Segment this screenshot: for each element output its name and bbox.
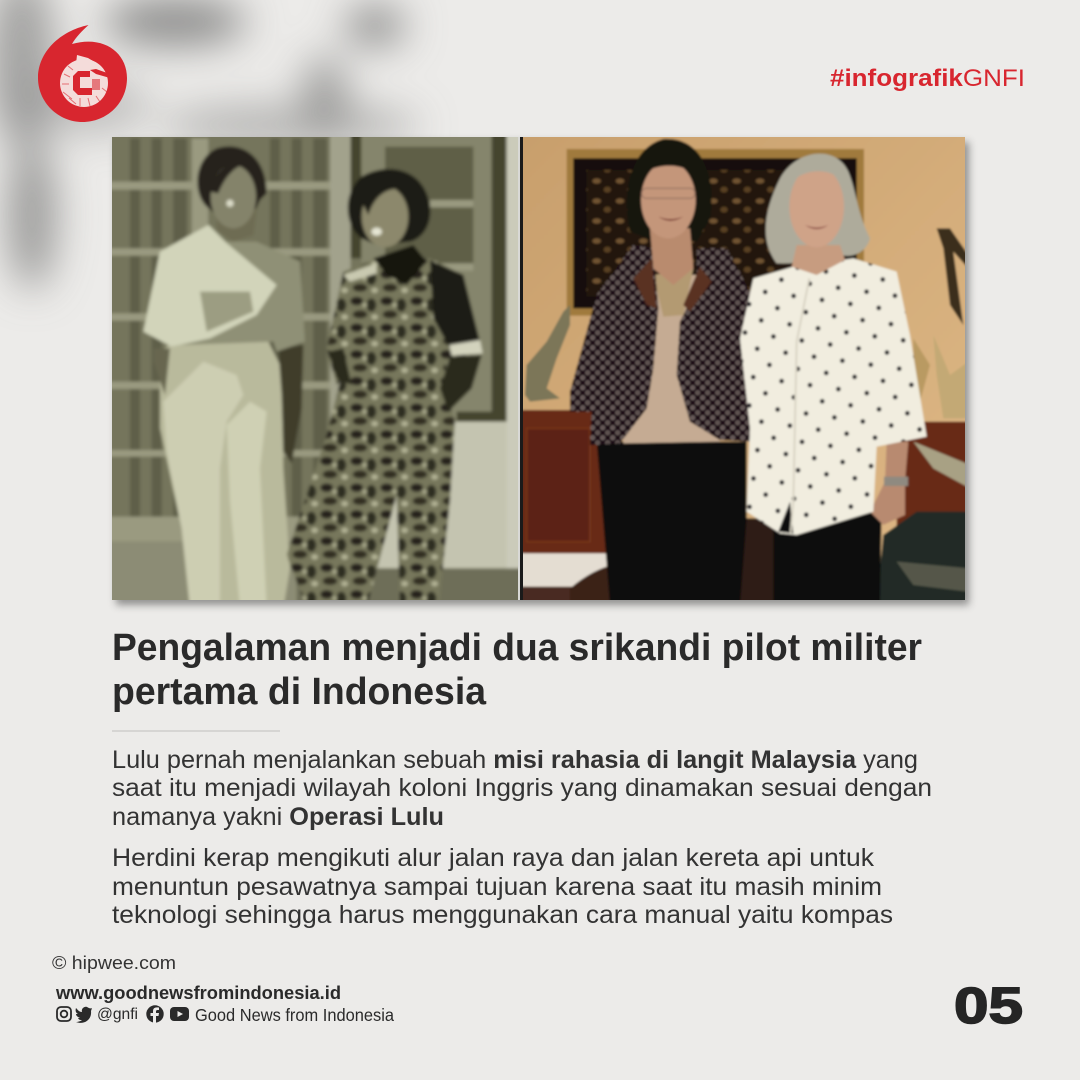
- paragraph 2: Herdini navigation: menuntun pesawatnya sampai tujuan karena saat itu masih minim: [112, 873, 882, 901]
- woman 1 hair: [197, 146, 267, 215]
- left woman blouse: [623, 275, 720, 443]
- framed tapestry: [567, 149, 864, 316]
- woman 2 face: [362, 186, 408, 247]
- channel name: Good News from Indonesia: [195, 1005, 394, 1025]
- woman 1 arm: [278, 345, 303, 463]
- paragraph 2: Herdini navigation: teknologi sehingga harus menggunakan cara manual yaitu kompas: [112, 901, 893, 929]
- right woman neck and face: [792, 245, 845, 275]
- heading: [112, 627, 922, 713]
- ornaments right: [913, 338, 930, 402]
- left woman jacket: [570, 245, 658, 445]
- divider: [112, 730, 280, 732]
- right woman arm and hand: [870, 442, 908, 525]
- page number: 05: [954, 977, 1023, 1034]
- paragraph 2: Herdini navigation: [112, 844, 893, 929]
- woman 2 trousers: [287, 368, 455, 608]
- woman 1 pants: [160, 338, 290, 608]
- icon: facebook: [146, 1005, 164, 1023]
- handle: @gnfi: @gnfi: [97, 1006, 138, 1023]
- icon: twitter: [76, 1007, 92, 1023]
- blurred leaf shadow background: [0, 0, 420, 290]
- left woman trousers: [597, 442, 747, 605]
- right woman hair: [766, 154, 870, 263]
- emblem hatching: [62, 66, 107, 106]
- heading: pertama di Indonesia: [112, 671, 487, 713]
- eagle head: [76, 55, 104, 71]
- icon: youtube: [170, 1007, 189, 1021]
- woman 2 shirt: [326, 258, 467, 386]
- photo frame divider: [112, 137, 965, 600]
- icon: instagram: [57, 1007, 71, 1021]
- letter G: [73, 71, 92, 95]
- right woman trousers: [773, 512, 882, 605]
- hashtag: #infografikGNFI: #infografik GNFI: [830, 65, 1025, 92]
- right woman polka dot blouse: [740, 258, 927, 535]
- website url: www.goodnewsfromindonesia.id: [55, 982, 341, 1003]
- left woman hair: [627, 139, 711, 242]
- social media row: [57, 1005, 394, 1025]
- woman 2 collar and hair: [348, 169, 430, 245]
- paragraph 1: Operasi Lulu: [112, 746, 932, 831]
- wooden cabinet: [517, 410, 610, 557]
- paragraph 2: Herdini navigation: Herdini kerap mengikuti alur jalan raya dan jalan kereta api untuk: [112, 844, 875, 872]
- woman 1 shirt: [184, 240, 306, 353]
- left woman neck and face: [650, 228, 693, 285]
- photo: two young pilots in uniform (left): [103, 128, 530, 608]
- paragraph 1: Operasi Lulu: namanya yakni Operasi Lulu: [112, 803, 444, 831]
- heading: Pengalaman menjadi dua srikandi pilot militer: [112, 627, 922, 669]
- photo shadow: [116, 142, 969, 605]
- woman 1 neck and face: [218, 208, 256, 239]
- logo: GNFI red droplet with eagle emblem: [38, 25, 127, 122]
- paragraph 1: Operasi Lulu: Lulu pernah menjalankan sebuah misi rahasia di langit Malaysia yang: [112, 746, 918, 774]
- sculpture left: [525, 305, 570, 402]
- emblem ring: [60, 59, 108, 107]
- photo source credit: © hipwee.com: [52, 953, 176, 973]
- paragraph 1: Operasi Lulu: saat itu menjadi wilayah koloni Inggris yang dinamakan sesuai dengan: [112, 774, 932, 802]
- photo: two elderly pilots in a living room (right): [517, 132, 973, 607]
